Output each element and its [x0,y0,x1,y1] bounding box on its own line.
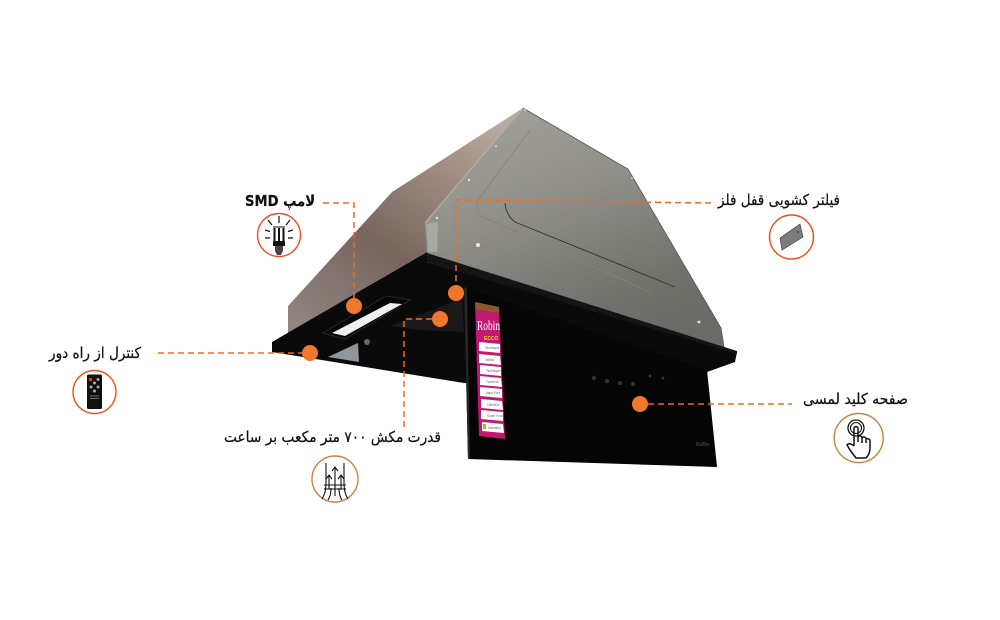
callout: remote control [48,344,318,414]
energy tag sticker: Robin [477,319,500,334]
screws [436,109,700,323]
callout: metal slide filter [448,191,840,301]
hood left brown face [288,108,523,333]
marker dot [302,345,318,361]
product: range hood [272,108,737,467]
hood right grey face [425,108,724,347]
label: فیلتر کشویی قفل فلز [717,191,840,209]
touch buttons [592,375,664,386]
energy tag sticker: Italia Pure [486,391,501,395]
icon: bulb [258,214,300,256]
energy tag sticker [475,302,505,439]
leader line [323,203,354,298]
icon: remote [73,370,116,414]
callout: SMD lamp [245,192,362,314]
label: صفحه کلید لمسی [803,390,908,408]
energy tag sticker: ECCO [484,336,499,342]
sheet metal seams [505,203,675,287]
marker dot [632,396,648,412]
energy tag sticker: Technique [486,369,501,373]
front touch panel [464,287,717,467]
leader line [404,319,432,428]
label: کنترل از راه دور [48,344,142,362]
panel logo: RoBin [696,442,710,448]
energy tag sticker: 165x50x [487,403,499,407]
lamp SMD light [332,303,402,336]
energy tag sticker: Warranty [488,426,501,430]
leader line [456,200,711,285]
callout: suction power [224,311,448,502]
lamp frame [323,296,410,339]
leader line [648,403,792,405]
callout: touch panel [632,390,908,462]
energy tag sticker: Technique [485,346,500,350]
marker dot [346,298,362,314]
energy tag sticker: 3x65w [485,358,495,362]
marker dot [432,311,448,327]
recess: motor opening [390,298,464,332]
leader line [158,352,302,354]
icon: filter [770,215,814,259]
icon: touch hand [834,414,883,462]
energy tag sticker: Super Fold [487,414,503,418]
black underside plate [272,252,737,383]
label: لامپ SMD [245,192,315,210]
label: قدرت مکش ۷۰۰ متر مکعب بر ساعت [224,428,441,446]
marker dot [448,285,464,301]
icon: airflow [312,456,358,502]
energy tag sticker: Turboval [486,380,499,384]
